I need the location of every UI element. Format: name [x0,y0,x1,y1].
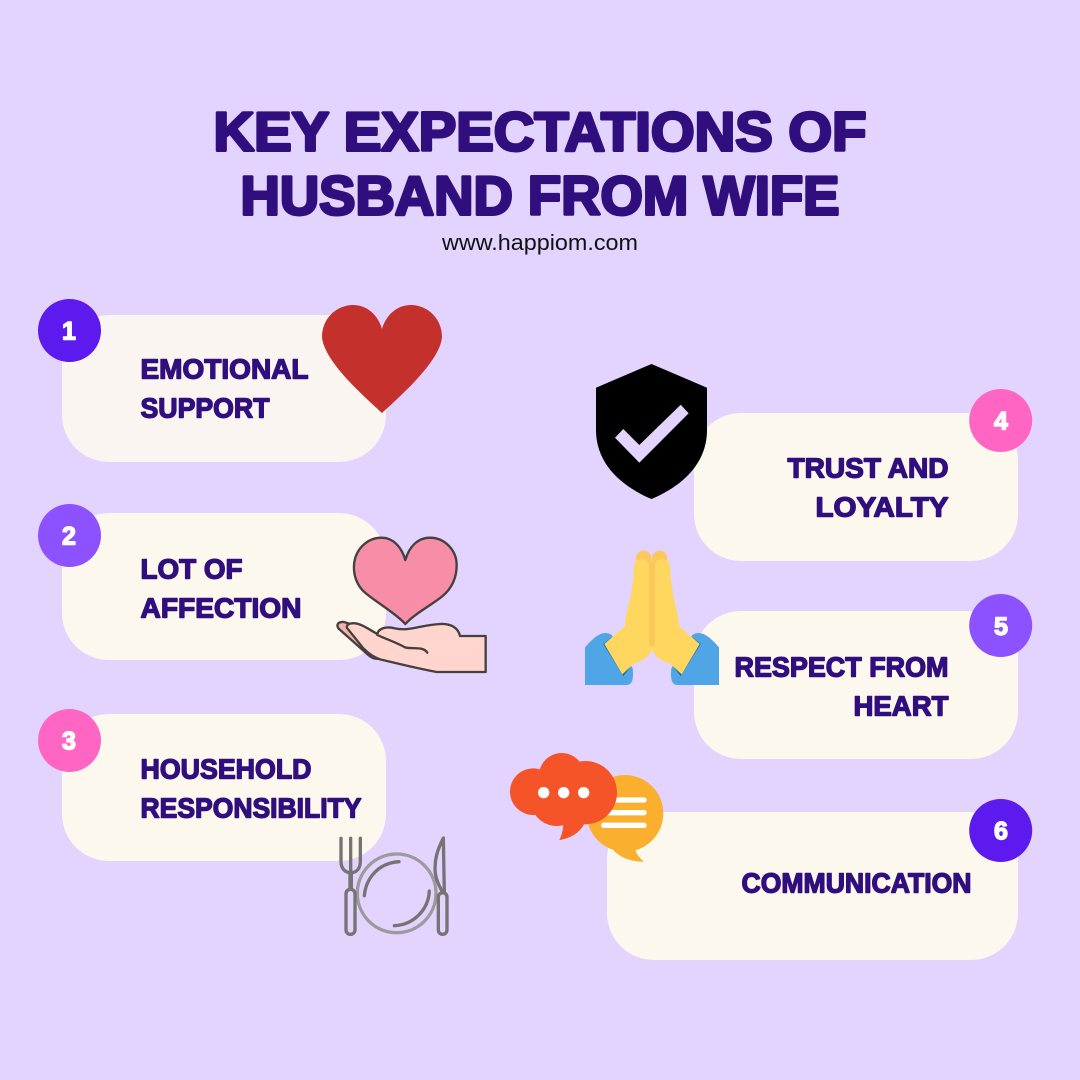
label: trust and loyalty [788,452,949,522]
icon: red heart [322,305,442,413]
label: household responsibility [140,753,362,823]
label: respect from heart: RESPECT FROM [734,652,948,683]
label: lot of affection: LOT OF [140,553,242,584]
badge 1: 1 [62,318,76,346]
badge 6 [969,799,1032,862]
badge 5: 5 [994,613,1008,641]
label: emotional support: SUPPORT [140,392,270,423]
panel: household responsibility [38,709,447,934]
badge 4 [969,389,1032,452]
label: lot of affection [140,553,302,623]
badge 1 [38,299,101,362]
card 2 [62,513,386,660]
icon: praying hands [585,551,719,685]
card 5 [694,611,1018,759]
panel: emotional support [38,299,442,462]
label: respect from heart [734,652,948,722]
panel: lot of affection [38,504,486,672]
label: emotional support: EMOTIONAL [140,353,308,384]
badge 2: 2 [62,522,76,550]
card 6 [607,812,1018,960]
label: trust and loyalty: LOYALTY [816,491,949,522]
icon: chat bubbles [510,753,663,862]
badge 3: 3 [62,728,76,756]
badge 6: 6 [994,818,1008,846]
label: household responsibility: HOUSEHOLD [140,753,312,784]
icon: heart over open hand [337,538,486,672]
icon: plate and cutlery [341,838,447,934]
badge 5 [969,594,1032,657]
label: communication: COMMUNICATION [742,867,972,898]
title: KEY EXPECTATIONS OF [214,100,866,162]
icon: shield with check [596,364,707,499]
label: lot of affection: AFFECTION [140,592,302,623]
badge 4: 4 [994,408,1008,436]
website url: www.happiom.com [441,230,638,255]
card 1 [62,315,386,462]
badge 3 [38,709,101,772]
label: trust and loyalty: TRUST AND [788,452,948,483]
label: respect from heart: HEART [854,691,948,722]
card 3 [62,714,386,861]
label: emotional support [140,353,308,423]
title [214,100,866,226]
badge 2 [38,504,101,567]
panel: trust and loyalty [596,364,1032,561]
panel: communication [510,753,1032,960]
title: HUSBAND FROM WIFE [240,164,840,226]
label: household responsibility: RESPONSIBILITY [140,792,362,823]
card 4 [694,413,1018,561]
panel: respect from heart [585,551,1032,759]
